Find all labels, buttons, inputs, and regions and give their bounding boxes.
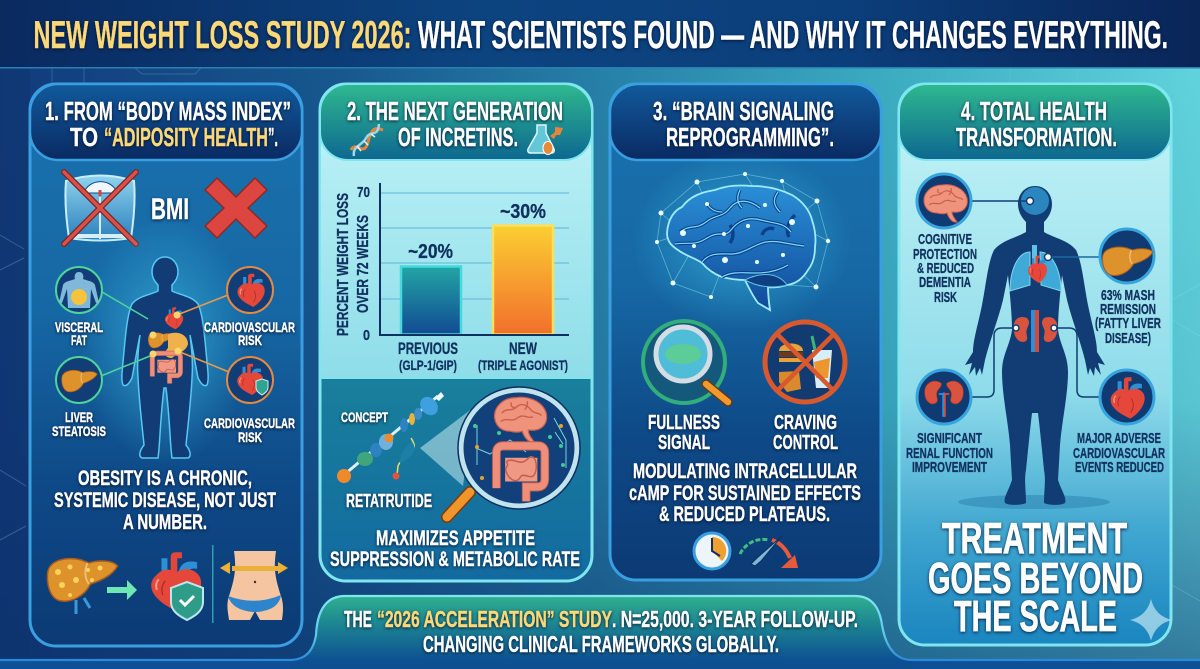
study banner: “2026 ACCELERATION” STUDY: [377, 606, 612, 632]
icon: flask and pills: [528, 125, 563, 154]
organ labels: LIVER: [65, 409, 93, 425]
panel 4 heading: 4. TOTAL HEALTH: [961, 96, 1107, 126]
x axis labels: [398, 339, 568, 373]
panel 2 heading: OF INCRETINS.: [398, 122, 518, 152]
panel 2 heading: [320, 84, 592, 160]
panel 2 caption: [330, 527, 580, 571]
statement text: [54, 467, 276, 534]
x axis labels: (TRIPLE AGONIST): [478, 357, 568, 373]
x axis labels: (GLP-1/GIP): [399, 357, 457, 373]
x axis labels: PREVIOUS: [398, 339, 458, 358]
title bar: NEW WEIGHT LOSS STUDY 2026:: [34, 14, 412, 57]
benefit: renal function: IMPROVEMENT: [912, 459, 987, 476]
panel 4: total health transformation: [899, 84, 1172, 645]
study banner: [0, 596, 1200, 669]
panel 3 heading: 3. “BRAIN SIGNALING: [653, 96, 834, 126]
bar: previous: [401, 241, 461, 334]
benefit: cognitive protection: [913, 231, 977, 306]
icon: fullness signal magnifier: [643, 321, 728, 403]
icon: glowing neural brain: [632, 150, 852, 330]
bar: previous: ~20%: [408, 241, 453, 263]
axis ticks: 70: [357, 184, 370, 201]
concept labels: CONCEPT: [341, 409, 388, 425]
icon: red cross: [205, 178, 267, 238]
panel 2 caption: MAXIMIZES APPETITE: [376, 527, 535, 550]
bar chart: [335, 183, 569, 373]
light beam: [420, 408, 473, 486]
axis ticks: [357, 184, 370, 344]
organ labels: CARDIOVASCULAR: [204, 319, 295, 335]
study banner: THE: [344, 606, 372, 632]
icon: crossed out weighing scale: [64, 172, 136, 244]
axis ticks: 0: [363, 327, 370, 344]
icon: magnifier with brain and gut: [447, 387, 580, 517]
icon: kidneys: [917, 370, 971, 424]
panel 1 heading: [30, 84, 302, 160]
benefit: cognitive protection: RISK: [934, 289, 957, 306]
benefit: renal function: [906, 430, 993, 476]
signal labels: [648, 412, 838, 454]
icon: fatty liver: [47, 559, 117, 614]
icon: craving control: [765, 322, 845, 402]
organ labels: RISK: [238, 429, 262, 445]
y axis label: PERCENT WEIGHT LOSS: [335, 193, 352, 336]
statement text: SYSTEMIC DISEASE, NOT JUST: [54, 489, 276, 512]
signal labels: CONTROL: [773, 432, 838, 454]
icon: visceral fat: [56, 267, 102, 313]
y axis label: [335, 193, 372, 336]
panel 1 heading: TO: [70, 122, 98, 152]
panel 1: from body mass index to adiposity health: [30, 84, 302, 646]
organ labels: CARDIOVASCULAR: [204, 415, 295, 431]
chart area background: [321, 110, 591, 378]
icon: retatrutide strand: [392, 438, 415, 480]
arrow: [107, 580, 137, 600]
signal labels: CRAVING: [774, 412, 837, 434]
panel 2: next generation of incretins: [320, 84, 592, 581]
benefit: renal function: RENAL FUNCTION: [906, 445, 993, 462]
icon: liver: [1100, 229, 1154, 283]
panel 4 conclusion: [928, 514, 1143, 641]
icon: measured waist: [220, 551, 288, 620]
panel 3 heading: REPROGRAMMING”.: [666, 122, 834, 152]
benefit: cognitive protection: PROTECTION: [913, 246, 977, 263]
panel 3 caption: [629, 460, 861, 526]
BMI label: BMI: [151, 193, 189, 226]
concept labels: [341, 409, 432, 511]
signal labels: FULLNESS: [648, 412, 720, 434]
panel 3: brain signaling reprogramming: [610, 84, 881, 580]
concept labels: RETATRUTIDE: [346, 491, 432, 511]
title bar: [0, 0, 1200, 68]
panel 1 heading: 1. FROM “BODY MASS INDEX”: [45, 96, 291, 126]
panel 3 caption: MODULATING INTRACELLULAR: [633, 460, 857, 483]
study banner: . N=25,000. 3-YEAR FOLLOW-UP.: [612, 606, 858, 632]
connector lines: [972, 201, 1100, 397]
benefit: cognitive protection: DEMENTIA: [919, 274, 971, 291]
benefit: cardiovascular events: [1073, 430, 1165, 476]
body figure with organs: [958, 186, 1110, 509]
body silhouette with organs: [80, 215, 250, 465]
panel 3 caption: & REDUCED PLATEAUS.: [659, 503, 830, 526]
panel 1 heading: ”.: [268, 122, 278, 152]
statement text: OBESITY IS A CHRONIC,: [78, 467, 252, 490]
icon: gauge with down arrow: [740, 536, 798, 568]
icon: peptide concept strand: [337, 392, 444, 483]
icon: clock: [694, 533, 730, 569]
benefit: mash remission: REMISSION: [1100, 301, 1156, 318]
icon: heart: [1100, 370, 1154, 424]
bar: new: ~30%: [500, 201, 546, 223]
icon: dna: [351, 124, 383, 156]
signal labels: SIGNAL: [658, 432, 710, 454]
panel 3 caption: cAMP FOR SUSTAINED EFFECTS: [629, 482, 861, 505]
organ labels: STEATOSIS: [52, 423, 106, 439]
organ labels: RISK: [238, 332, 262, 348]
panel 3 heading: [610, 84, 881, 160]
icon: heart with shield: [151, 552, 203, 620]
x axis labels: NEW: [509, 339, 538, 358]
panel 2 heading: 2. THE NEXT GENERATION: [347, 96, 563, 126]
y axis label: OVER 72 WEEKS: [355, 215, 372, 313]
icon: liver steatosis: [56, 357, 102, 403]
study banner: CHANGING CLINICAL FRAMEWORKS GLOBALLY.: [423, 631, 779, 657]
divider: [212, 545, 214, 623]
benefit: mash remission: (FATTY LIVER: [1095, 315, 1161, 332]
panel 1 heading: “ADIPOSITY HEALTH: [104, 122, 268, 152]
icon: cardiovascular risk: [227, 267, 273, 313]
connector lines: [101, 292, 229, 376]
statement text: A NUMBER.: [123, 511, 207, 534]
connector dots: [1013, 198, 1057, 331]
organ labels: [52, 319, 295, 445]
benefit: renal function: SIGNIFICANT: [917, 430, 982, 447]
organ labels: FAT: [71, 332, 87, 348]
icon: brain: [917, 174, 971, 228]
bar: new: [493, 201, 553, 334]
benefit: cognitive protection: & REDUCED: [917, 260, 974, 277]
sparkle: [1130, 599, 1172, 641]
panel 2 caption: SUPPRESSION & METABOLIC RATE: [330, 548, 580, 571]
benefit: mash remission: [1095, 287, 1161, 347]
panel 4 conclusion: THE SCALE: [954, 592, 1117, 641]
benefit: mash remission: DISEASE): [1105, 330, 1151, 347]
benefit: cognitive protection: COGNITIVE: [918, 231, 972, 248]
benefit: mash remission: 63% MASH: [1101, 287, 1155, 304]
organ labels: VISCERAL: [55, 319, 103, 335]
icon: cardiovascular risk with shield: [227, 357, 273, 403]
panel 4 heading: [899, 84, 1171, 160]
